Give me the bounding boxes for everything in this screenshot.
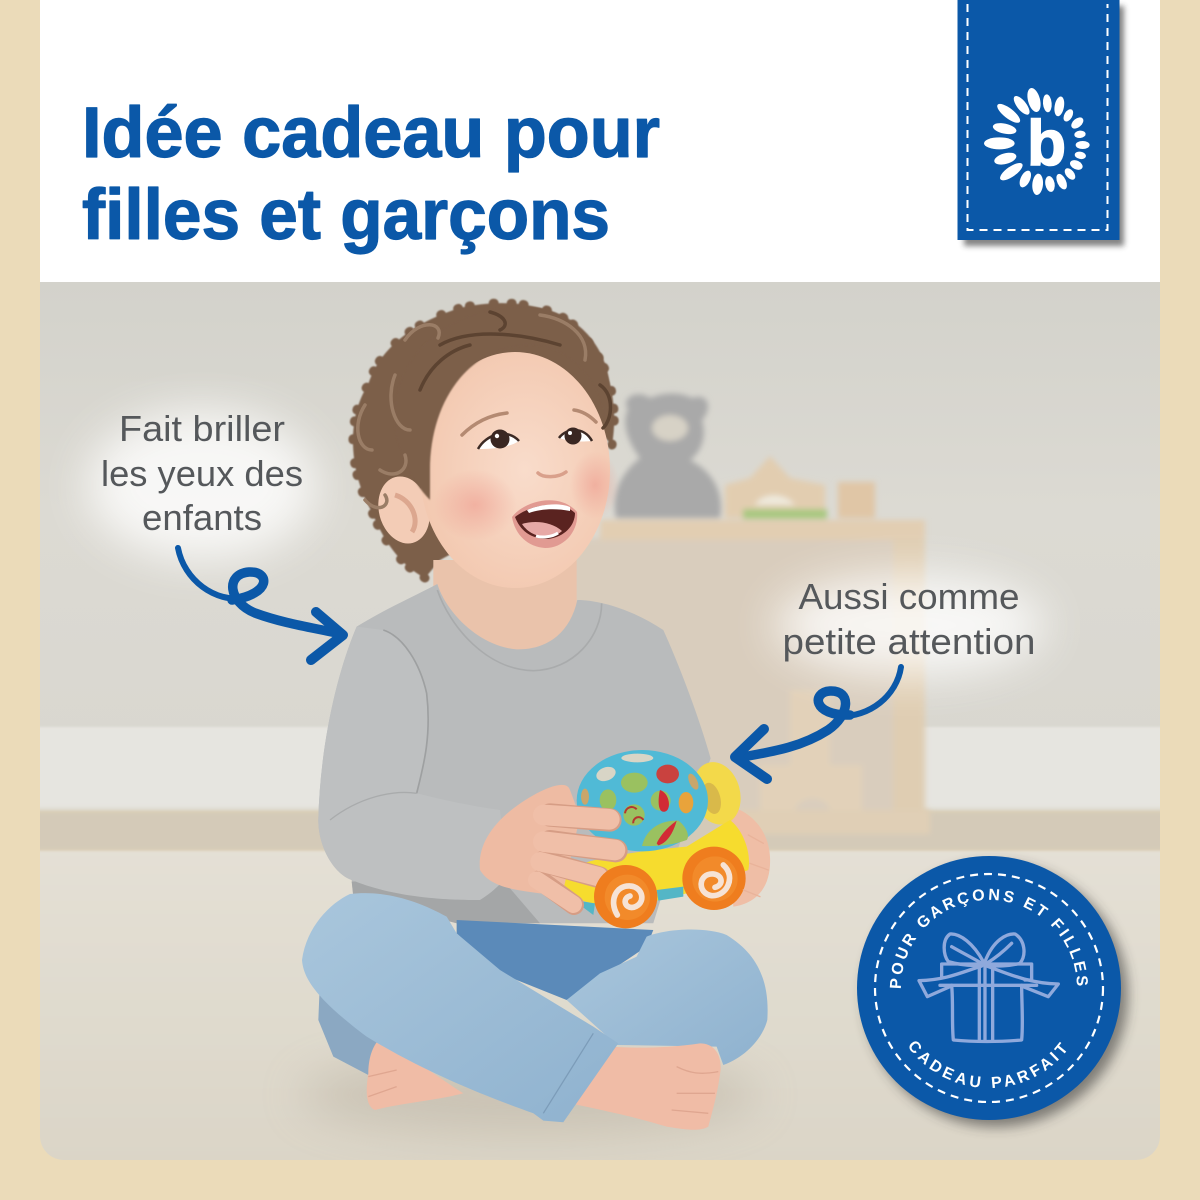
brand letter b: b [1027, 107, 1066, 179]
annotation: petite attention: Aussi comme [798, 576, 1020, 617]
jeans front leg [302, 893, 618, 1122]
ear [378, 476, 430, 544]
right foot [570, 1043, 721, 1130]
yellow car body [558, 820, 749, 903]
hair back [353, 303, 614, 578]
legs and feet [302, 893, 768, 1130]
hair curls [358, 312, 610, 508]
sweater and neck [318, 560, 711, 923]
eyebrows [462, 410, 596, 435]
right fingers [743, 835, 768, 897]
floor shadow [300, 1057, 760, 1133]
toy car and hands [480, 750, 770, 928]
badge bottom text: CADEAU PARFAIT [910, 1041, 1066, 1088]
left foot [367, 1038, 463, 1110]
orange wheels [594, 865, 657, 928]
logo tag [958, 0, 1124, 246]
right hand behind toy [730, 807, 770, 907]
annotation: petite attention: petite attention [782, 621, 1036, 662]
annotation: petite attention [782, 576, 1036, 662]
blurred shelf with toys [570, 394, 930, 834]
annotation: fait briller: Fait briller [119, 408, 285, 449]
left hand [480, 785, 580, 893]
title [82, 94, 660, 255]
neck [433, 560, 577, 650]
annotation: fait briller: les yeux des [101, 453, 303, 494]
head [420, 352, 610, 588]
annotation: fait briller [101, 408, 303, 538]
arrow: right [735, 667, 901, 779]
jeans crotch [457, 920, 653, 1000]
sleeve [318, 734, 499, 900]
blurred room background [20, 282, 1180, 1171]
arrow: left [178, 548, 343, 660]
badge: cadeau parfait [856, 856, 1136, 1134]
title: Idée cadeau pour [82, 94, 660, 173]
jeans right leg [567, 930, 768, 1065]
text glow: left [87, 410, 317, 560]
lower torso shade [352, 877, 540, 923]
photo scene panel [20, 282, 1180, 1171]
wheel swirls [614, 865, 730, 915]
eyes [478, 428, 592, 449]
toes [368, 1067, 718, 1113]
badge top text: POUR GARÇONS ET FILLES [890, 888, 1088, 988]
annotation: fait briller: enfants [142, 497, 262, 538]
torso [318, 584, 711, 923]
toy handle ring [696, 762, 741, 824]
blue rattle ball [577, 750, 708, 851]
forehead hair [395, 307, 610, 500]
child [302, 303, 768, 1130]
left fingers [537, 815, 616, 905]
nose [538, 472, 566, 477]
mouth [512, 500, 577, 548]
collar [437, 590, 602, 671]
icon: gift box [919, 934, 1058, 1041]
text glow: right [775, 575, 1045, 675]
brand flower [984, 87, 1090, 195]
cheeks [445, 478, 508, 532]
white header panel [40, 0, 1160, 283]
jeans back leg [318, 995, 376, 1075]
title: filles et garçons [82, 176, 610, 255]
